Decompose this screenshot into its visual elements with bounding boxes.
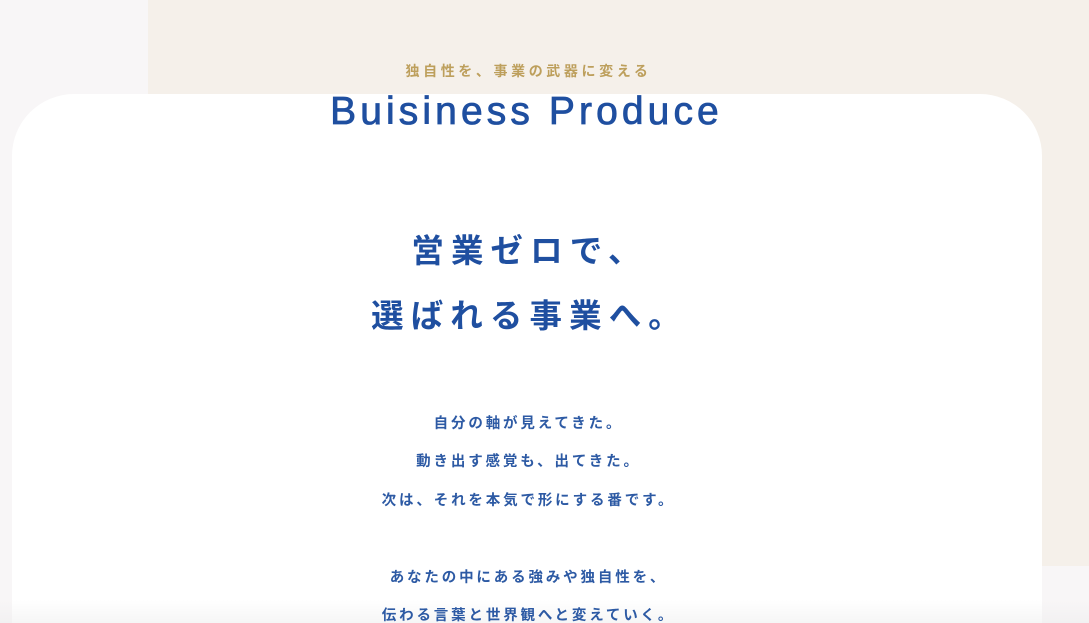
eyebrow text: 独自性を、事業の武器に変える [406,63,651,79]
heading [371,233,688,334]
body line 2: 動き出す感覚も、出てきた。 [416,454,641,470]
heading line 1: 営業ゼロで、 [411,233,648,269]
body line 3: 次は、それを本気で形にする番です。 [382,493,675,509]
beige background panel [148,0,1089,566]
title: Buisiness Produce [330,90,723,133]
body line 4: あなたの中にある強みや独自性を、 [390,570,667,586]
body line 1: 自分の軸が見えてきた。 [434,416,623,432]
bottom fade shadow [0,600,1089,623]
heading line 2: 選ばれる事業へ。 [371,298,688,334]
body text [382,415,675,623]
